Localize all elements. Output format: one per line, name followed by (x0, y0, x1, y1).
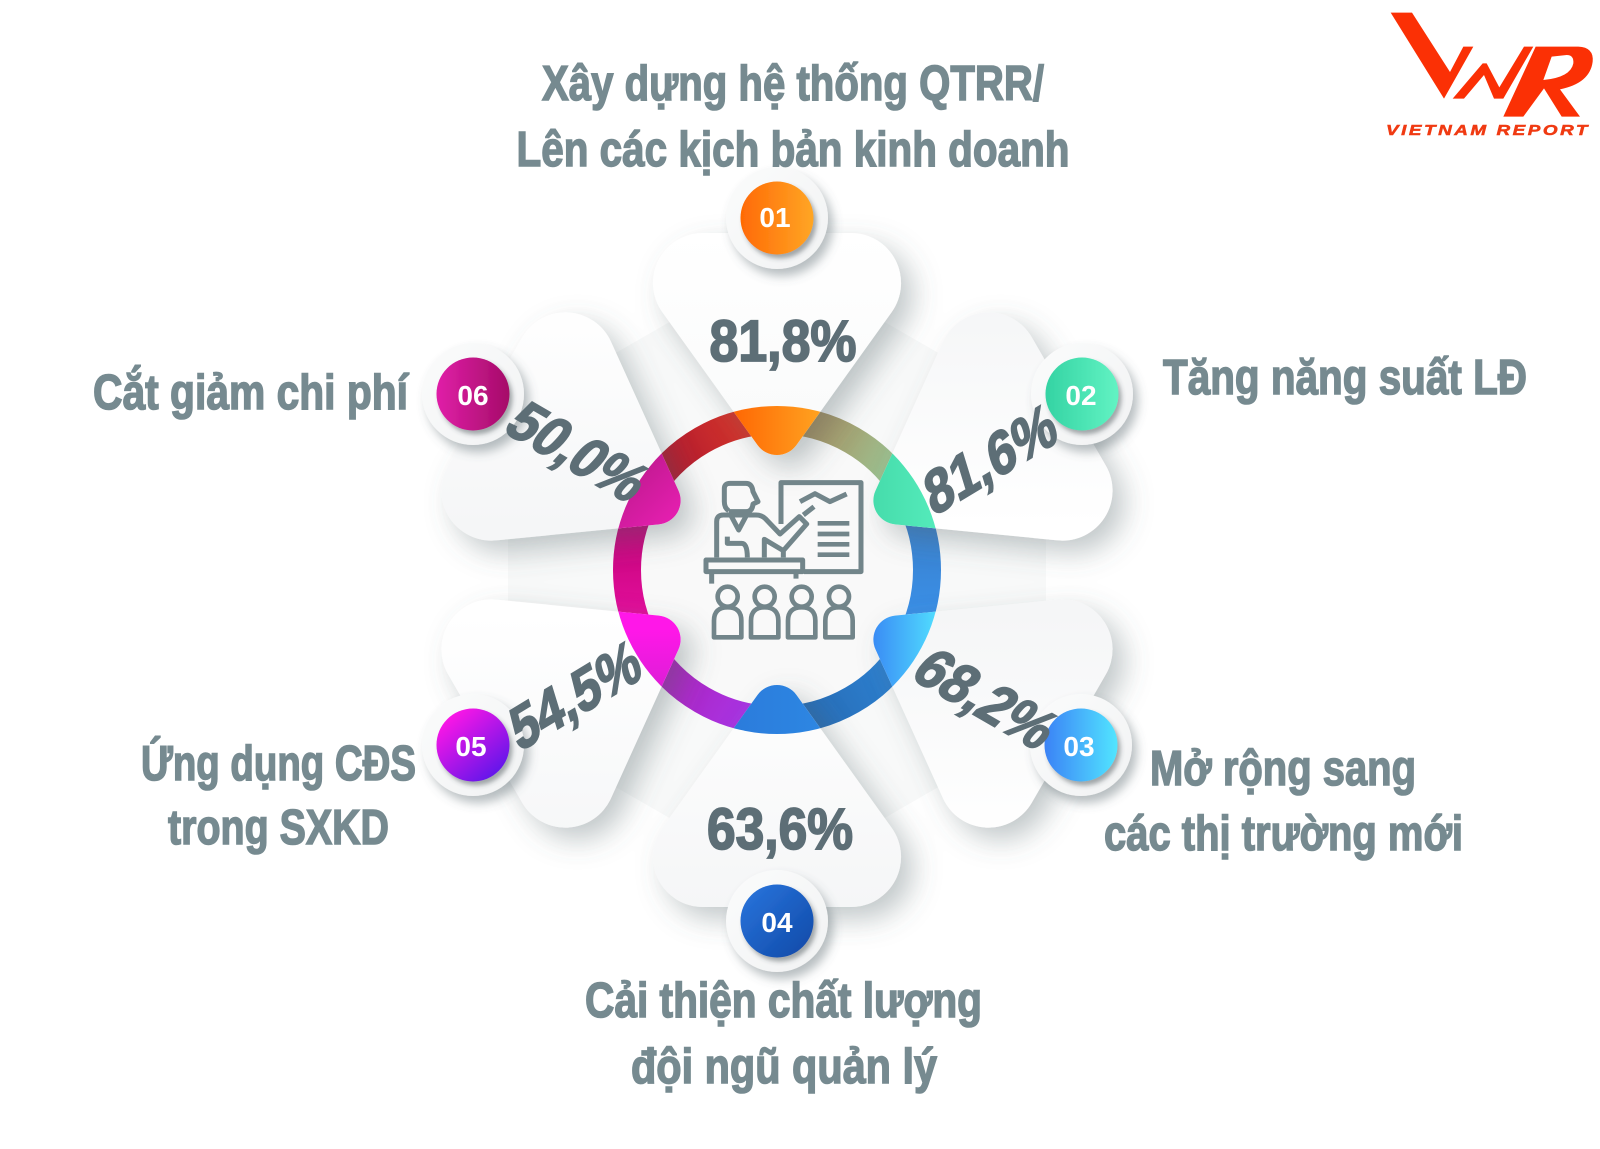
presenter body and arm (717, 507, 814, 557)
petal 06 (423, 294, 739, 620)
audience person 3 (788, 587, 815, 637)
value 06: 50,0% (493, 391, 663, 513)
logo: Vietnam Report (1386, 13, 1593, 139)
label 01 (516, 57, 1070, 177)
label 04: đội ngũ quản lý (631, 1040, 937, 1094)
board text lines (818, 523, 849, 555)
badge 06 (422, 343, 524, 445)
tip 05 (618, 612, 681, 686)
ring arc 2 to 3 (907, 495, 927, 645)
value 05: 54,5% (503, 627, 648, 765)
label 03 (1104, 742, 1463, 861)
badge 04: 04 (761, 907, 793, 938)
label 05: Ứng dụng CĐS (141, 736, 416, 791)
tip 02 (873, 454, 936, 528)
badge 03: 03 (1063, 731, 1095, 762)
ring arc 4 to 5 (647, 645, 777, 720)
coloured petal tips (618, 406, 936, 734)
label 03: Mở rộng sang (1150, 742, 1416, 796)
label 01: Xây dựng hệ thống QTRR/ (542, 57, 1044, 111)
ring arc 1 to 2 (777, 420, 907, 495)
label 05 (141, 736, 416, 855)
label 05: trong SXKD (168, 801, 389, 855)
ring arc 3 to 4 (777, 645, 907, 720)
petal 03 (815, 520, 1131, 846)
ring arc 6 to 1 (647, 420, 777, 495)
badge 03 (1030, 694, 1132, 796)
value 03: 68,2% (900, 638, 1072, 761)
value 01: 81,8% (710, 309, 856, 374)
audience person 4 (825, 587, 853, 637)
presenter head (724, 483, 758, 512)
desk (706, 560, 803, 584)
tip 01 (734, 406, 820, 455)
petals (423, 233, 1131, 907)
badge 05: 05 (455, 731, 487, 762)
petal 02 (815, 294, 1131, 620)
presentation board (781, 483, 861, 572)
badge 01 (726, 167, 828, 269)
label 01: Lên các kịch bản kinh doanh (516, 123, 1070, 177)
logo wordmark: VIETNAM REPORT (1386, 122, 1590, 139)
badge 04 (726, 870, 828, 972)
icon: presenter with audience (706, 483, 861, 637)
label 06: Cắt giảm chi phí (93, 365, 409, 420)
label 02: Tăng năng suất LĐ (1163, 351, 1527, 405)
logo mark VNR (1391, 13, 1593, 117)
tip 03 (873, 612, 936, 686)
ring arc 5 to 6 (627, 495, 647, 645)
central disc (637, 430, 917, 710)
value 04: 63,6% (707, 797, 853, 862)
colour ring (627, 420, 927, 720)
label 04 (585, 974, 982, 1094)
background hexagon (508, 260, 1046, 880)
audience person 2 (751, 587, 778, 637)
value 02: 81,6% (917, 390, 1064, 529)
petal 05 (423, 520, 739, 846)
board chart line (800, 494, 847, 502)
petal 01 (653, 233, 901, 455)
badge 06: 06 (457, 380, 489, 411)
tip 06 (618, 454, 681, 528)
badge 02: 02 (1065, 380, 1097, 411)
badge 02 (1031, 343, 1133, 445)
badge 05 (422, 694, 524, 796)
label 03: các thị trường mới (1104, 807, 1463, 861)
tip 04 (734, 685, 820, 734)
label 04: Cải thiện chất lượng (585, 974, 982, 1028)
petal 04 (653, 685, 901, 907)
badge 01: 01 (759, 202, 791, 233)
audience person 1 (714, 587, 741, 637)
